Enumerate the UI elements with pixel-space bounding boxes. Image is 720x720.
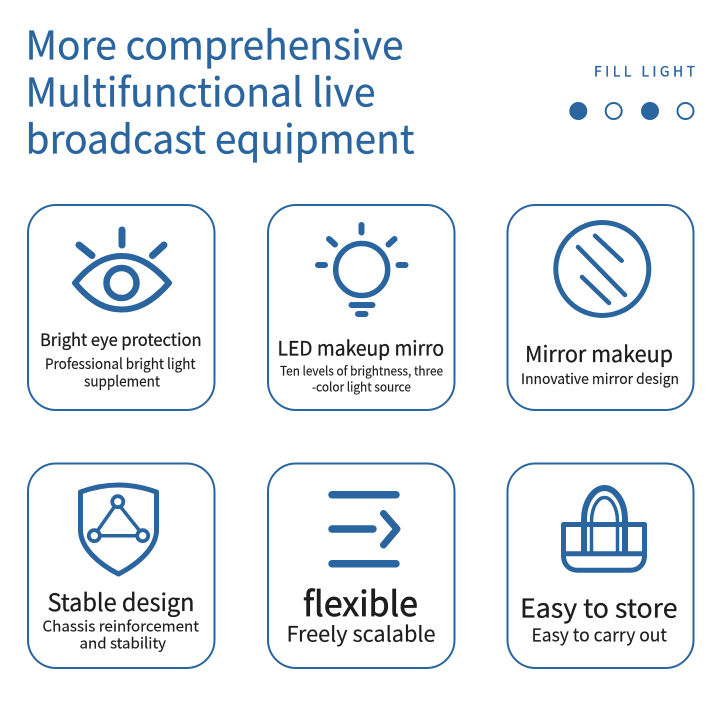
title: broadcast equipment	[26, 109, 415, 166]
icon: tote bag	[564, 488, 644, 570]
card description: and stability	[80, 632, 166, 654]
card description: Ten levels of brightness, three	[280, 360, 443, 380]
panel: stable design	[28, 464, 214, 668]
title: More comprehensive	[26, 14, 404, 72]
label: fill light: FILL LIGHT	[594, 62, 695, 82]
card description	[42, 616, 199, 654]
panel: mirror makeup	[508, 205, 694, 410]
card description	[45, 353, 196, 392]
card heading: Mirror makeup	[525, 337, 673, 369]
icon: light bulb	[318, 225, 406, 314]
panel: LED makeup mirror	[268, 205, 454, 410]
card heading: Bright eye protection	[40, 326, 202, 351]
panel: easy to store	[508, 464, 694, 668]
card heading: Easy to store	[520, 588, 678, 626]
card description: Professional bright light	[45, 353, 196, 374]
icon: shield with triangle	[80, 485, 156, 574]
title: Multifunctional live	[26, 62, 376, 119]
panel: flexible	[268, 464, 454, 668]
card heading: Stable design	[48, 583, 194, 618]
pagination dots	[569, 102, 694, 120]
panel: bright eye protection	[28, 205, 214, 410]
icon: round mirror	[556, 222, 649, 316]
title	[26, 14, 415, 166]
icon: eye	[75, 230, 169, 310]
card description: -color light source	[312, 376, 411, 396]
card description: Easy to carry out	[532, 622, 667, 648]
icon: lines with arrow	[332, 495, 397, 564]
card description: Chassis reinforcement	[42, 616, 199, 636]
card heading: LED makeup mirro	[278, 332, 444, 362]
card description	[280, 360, 443, 396]
card description: supplement	[84, 370, 160, 392]
card heading: flexible	[303, 577, 418, 626]
card description: Freely scalable	[286, 619, 436, 649]
card description: Innovative mirror design	[521, 368, 679, 389]
